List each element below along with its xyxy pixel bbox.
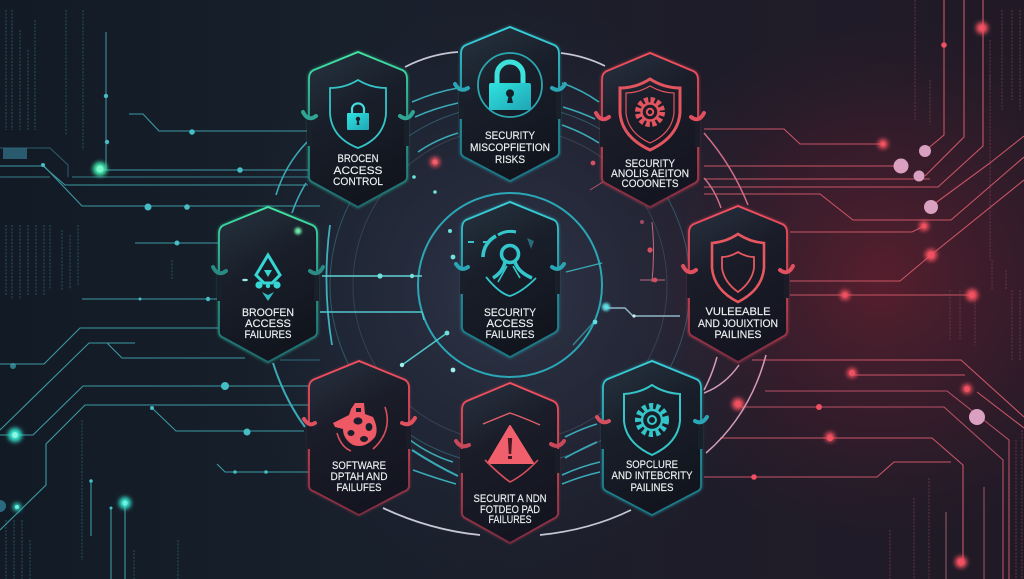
icon: shield with padlock (330, 80, 386, 148)
circuit nodes right (732, 22, 988, 568)
label: SOPCLURE (626, 459, 678, 471)
label: SOFTWARE (332, 460, 386, 472)
badge: broken access control (303, 52, 413, 207)
label (698, 306, 778, 341)
label (330, 460, 388, 494)
label: MISCOPFIETION (470, 142, 550, 154)
label: SECURIT A NDN (474, 493, 547, 505)
label: SECURITY (625, 158, 676, 170)
icon: double shield (712, 234, 764, 302)
label (242, 307, 294, 341)
icon: warning triangle (483, 413, 540, 482)
central connector lines (320, 170, 680, 365)
label: SECURITY (485, 130, 536, 142)
label: COOONETS (622, 178, 678, 190)
label: ACCESS (333, 165, 383, 177)
label: FOTDEO PAD (480, 504, 540, 516)
badge: vulnerable and injection failures (683, 206, 793, 362)
label (470, 130, 550, 166)
label: RISKS (495, 154, 525, 166)
icon: shield with gear (624, 385, 680, 455)
badge: software depth and failures (304, 361, 415, 515)
badge: security misconfiguration risks (455, 27, 565, 181)
circuit lines right (704, 0, 1024, 579)
label: ACCESS (245, 318, 291, 330)
label: ANOLIS AEITON (611, 168, 689, 180)
outer pale ring arcs (383, 52, 631, 535)
icon: shield with gear (620, 79, 680, 150)
label (333, 153, 383, 188)
label: FAILURES (244, 329, 292, 341)
label: PAILINES (714, 329, 762, 341)
concentric rings (273, 52, 766, 535)
label (612, 459, 693, 494)
label (474, 493, 547, 526)
label: AND JOUIXTION (698, 318, 778, 330)
label: SECURITY (484, 307, 537, 319)
label: PAILINES (630, 482, 674, 494)
teal arc segments (273, 83, 600, 484)
label: AND INTEBCRITY (612, 470, 693, 482)
label (484, 307, 537, 341)
label: ACCESS (486, 318, 534, 330)
icon: person with arc (468, 231, 536, 296)
label: FAILURES (486, 329, 534, 341)
badge: security analysis components (596, 53, 704, 207)
central network nodes (377, 157, 657, 372)
badge: security and logging failures (456, 383, 564, 543)
label: BROOFEN (242, 307, 294, 319)
label: DPTAH AND (330, 471, 388, 483)
circuit lines left (0, 32, 320, 579)
badge: broken access failures (213, 207, 323, 362)
label: CONTROL (333, 176, 383, 188)
icon: rocket emblem (242, 255, 281, 301)
icon: broken wheel (333, 403, 387, 451)
label: VULEEABLE (706, 306, 770, 318)
label: FAILUFES (336, 482, 382, 494)
badge: software and integrity failures (597, 361, 707, 515)
badge: security access failures (456, 202, 564, 357)
label: BROCEN (338, 153, 379, 165)
circuit nodes left (0, 94, 268, 512)
label (611, 158, 689, 190)
label: FAILURES (488, 514, 532, 526)
pink arc segments (704, 133, 766, 453)
icon: padlock in circle (478, 53, 542, 117)
